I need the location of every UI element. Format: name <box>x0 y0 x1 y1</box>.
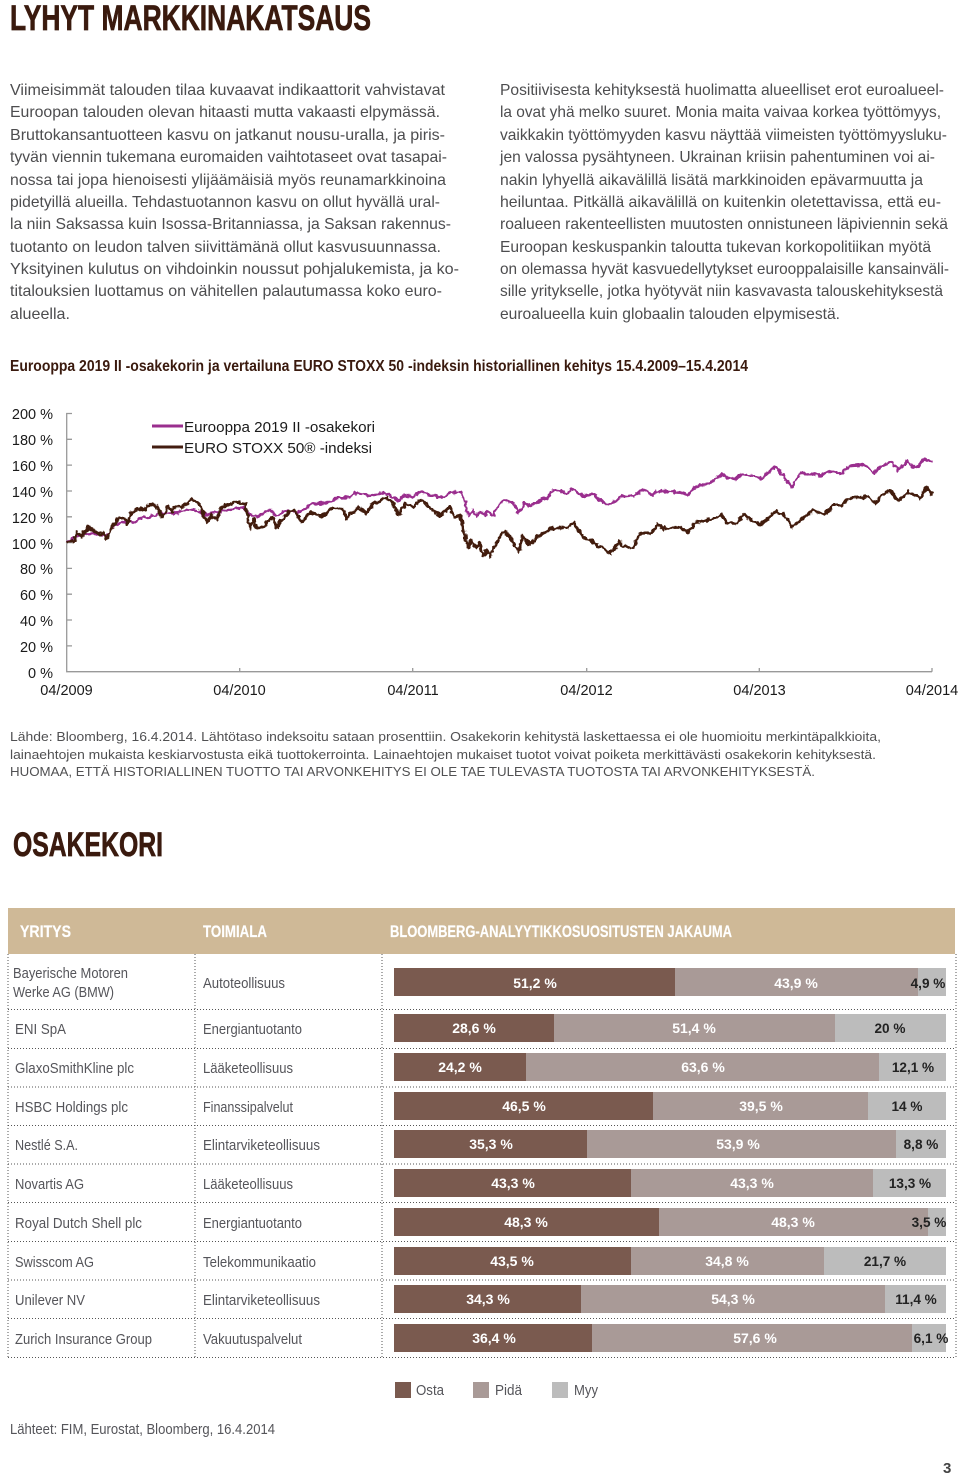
row: Royal Dutch Shell: Energiantuotanto <box>203 1216 302 1232</box>
text block: left column: alueella. <box>10 306 70 323</box>
row: BMW: Autoteollisuus <box>203 976 285 992</box>
text block: right column: nakin lyhyellä aikavälillä lisätä markkinoiden epävarmuutta ja <box>500 172 923 189</box>
axes <box>67 414 932 672</box>
y axis labels <box>12 407 53 682</box>
row: Unilever: Unilever NV <box>15 1293 85 1309</box>
row: Unilever: Elintarviketeollisuus <box>203 1293 320 1309</box>
row: Zurich: 36,4 % <box>472 1330 516 1346</box>
y axis labels: 80 % <box>20 562 53 578</box>
table: osakekori <box>8 908 956 1358</box>
text block: right column <box>499 82 949 323</box>
row: Novartis: 43,3 % <box>491 1175 535 1191</box>
row: HSBC <box>15 1092 946 1120</box>
row: Royal Dutch Shell: 48,3 % <box>771 1214 815 1230</box>
row: ENI: ENI SpA <box>15 1022 66 1038</box>
row: Nestlé: Nestlé S.A. <box>15 1138 78 1154</box>
row: HSBC: 46,5 % <box>502 1098 546 1114</box>
text block: right column: la ovat yhä melko suuret. Monia maita vaivaa korkea työttömyys, <box>500 104 941 121</box>
table header: BLOOMBERG-ANALYYTIKKOSUOSITUSTEN JAKAUMA <box>390 922 732 941</box>
legend: chart: EURO STOXX 50® -indeksi <box>184 440 372 457</box>
row: BMW: Bayerische Motoren <box>13 966 128 982</box>
row: GlaxoSmithKline: 63,6 % <box>681 1059 725 1075</box>
y axis labels: 20 % <box>20 640 53 656</box>
text block: left column: Viimeisimmät talouden tilaa kuvaavat indikaattorit vahvistavat <box>10 82 446 99</box>
legend: recommendations: Myy <box>574 1383 599 1399</box>
heading: Osakekori: OSAKEKORI <box>13 826 163 864</box>
text block: left column: titalouksien luottamus on vähitellen palautumassa koko euro- <box>10 283 442 300</box>
text block: right column: heiluntaa. Pitkällä aikavälillä on kuitenkin oletettavissa, että eu- <box>500 194 941 211</box>
text block: right column: jen valossa pysähtyneen. Ukrainan kriisin pahentuminen voi ai- <box>499 149 935 166</box>
row: Zurich: Zurich Insurance Group <box>15 1332 152 1348</box>
row: Swisscom: 43,5 % <box>490 1253 534 1269</box>
table grid <box>8 954 956 1358</box>
legend: chart: Eurooppa 2019 II -osakekori <box>184 419 375 436</box>
y axis labels: 120 % <box>12 511 53 527</box>
text block: left column: nossa tai jopa hienoisesti ylijäämäisiä myös reunamarkkinoina <box>10 172 446 189</box>
row: Zurich: 6,1 % <box>914 1331 948 1346</box>
table header: YRITYS <box>20 922 71 941</box>
legend: chart <box>152 419 375 457</box>
x axis labels: 04/2011 <box>387 683 439 699</box>
row: ENI: 51,4 % <box>672 1020 716 1036</box>
source note: HUOMAA, ETTÄ HISTORIALLINEN TUOTTO TAI ARVONKEHITYS EI OLE TAE TULEVASTA TUOTOSTA TAI ARVONKEHITYKSESTÄ. <box>10 765 815 779</box>
y axis labels: 100 % <box>12 537 53 553</box>
row: BMW <box>13 966 946 1001</box>
row: GlaxoSmithKline: 24,2 % <box>438 1059 482 1075</box>
row: Zurich: Vakuutuspalvelut <box>203 1332 302 1348</box>
row: Swisscom: Swisscom AG <box>15 1255 94 1271</box>
text block: right column: vaikkakin työttömyyden kasvu näyttää viimeisten työttömyysluku- <box>500 127 947 144</box>
sources: Lähteet: FIM, Eurostat, Bloomberg, 16.4.2014 <box>10 1422 275 1438</box>
legend: recommendations <box>395 1382 599 1399</box>
row: Royal Dutch Shell: Royal Dutch Shell plc <box>15 1216 142 1232</box>
text block: left column: Bruttokansantuotteen kasvu on jatkanut nousu-uralla, ja piris- <box>10 127 445 144</box>
row: ENI: 20 % <box>875 1021 905 1036</box>
source note <box>10 730 881 779</box>
row: BMW: Werke AG (BMW) <box>13 985 114 1001</box>
text block: left column: Euroopan talouden olevan hitaasti mutta vakaasti elpymässä. <box>10 104 440 121</box>
text block: left column <box>10 82 459 323</box>
row: Novartis: Novartis AG <box>15 1177 84 1193</box>
series: Eurooppa 2019 II -osakekori <box>67 458 932 542</box>
text block: right column: sille yritykselle, jotka hyötyvät niin kasvavasta talouskehityksestä <box>500 283 943 300</box>
table header <box>8 908 955 954</box>
row: Royal Dutch Shell: 48,3 % <box>504 1214 548 1230</box>
text block: right column: Positiivisesta kehityksestä huolimatta alueelliset erot euroalueel- <box>500 82 944 99</box>
text block: right column: roalueen rakenteellisten muutosten onnistuneen läpiviennin sekä <box>500 216 948 233</box>
text block: left column: Yksityinen kulutus on vihdoinkin noussut pohjalukemista, ja ko- <box>10 261 459 278</box>
row: Unilever <box>15 1285 946 1313</box>
row: Royal Dutch Shell: 3,5 % <box>912 1215 946 1230</box>
y axis labels: 140 % <box>12 485 53 501</box>
x axis labels: 04/2013 <box>733 683 786 699</box>
row: GlaxoSmithKline: 12,1 % <box>892 1060 934 1075</box>
legend: recommendations: Pidä <box>495 1383 523 1399</box>
source note: Lähde: Bloomberg, 16.4.2014. Lähtötaso indeksoitu sataan prosenttiin. Osakekorin kehitystä laskettaessa ei ole huomioitu merkintäpalkkioita, <box>10 730 881 744</box>
title: Lyhyt markkinakatsaus: LYHYT MARKKINAKATSAUS <box>10 0 371 38</box>
row: Swisscom: 21,7 % <box>864 1254 906 1269</box>
row: GlaxoSmithKline: GlaxoSmithKline plc <box>15 1061 134 1077</box>
row: HSBC: 14 % <box>892 1099 922 1114</box>
row: HSBC: 39,5 % <box>739 1098 783 1114</box>
x axis labels: 04/2010 <box>213 683 266 699</box>
row: ENI <box>15 1014 946 1042</box>
row: Swisscom: Telekommunikaatio <box>203 1255 316 1271</box>
line chart <box>12 407 958 699</box>
row: GlaxoSmithKline: Lääketeollisuus <box>203 1061 293 1077</box>
x axis labels: 04/2012 <box>560 683 613 699</box>
row: GlaxoSmithKline <box>15 1053 946 1081</box>
row: Swisscom: 34,8 % <box>705 1253 749 1269</box>
row: Nestlé: 53,9 % <box>716 1136 760 1152</box>
row: ENI: 28,6 % <box>452 1020 496 1036</box>
text block: left column: pidetyillä alueilla. Tehdastuotannon kasvu on ollut hyvällä ural- <box>10 194 440 211</box>
row: BMW: 43,9 % <box>774 975 818 991</box>
row: Novartis: 13,3 % <box>889 1176 931 1191</box>
source note: lainaehtojen mukaista keskiarvostusta eikä tuottokerrointa. Lainaehtojen mukaiset tuotot voivat poiketa merkittävästi osakekorin kehityksestä. <box>10 748 876 762</box>
row: ENI: Energiantuotanto <box>203 1022 302 1038</box>
row: Swisscom <box>15 1247 946 1275</box>
row: Novartis: Lääketeollisuus <box>203 1177 293 1193</box>
text block: right column: euroalueella kuin globaalin talouden elpymisestä. <box>500 306 840 323</box>
text block: right column: on olemassa hyvät kasvuedellytykset eurooppalaisille kansainväli- <box>500 261 949 278</box>
row: Novartis: 43,3 % <box>730 1175 774 1191</box>
y axis labels: 160 % <box>12 459 53 475</box>
legend: recommendations: Osta <box>416 1383 445 1399</box>
text block: left column: tuotanto on leudon talven siivittämänä ollut kasvusuunnassa. <box>10 239 441 256</box>
table header: TOIMIALA <box>203 922 267 941</box>
row: BMW: 4,9 % <box>911 976 945 991</box>
row: Novartis <box>15 1169 946 1197</box>
text block: left column: tyvän viennin tukemana euromaiden vaihtotaseet ovat tasapai- <box>10 149 447 166</box>
row: Nestlé: 8,8 % <box>904 1137 938 1152</box>
chart title: Eurooppa 2019 II -osakekorin ja vertailuna EURO STOXX 50 -indeksin historiallinen kehitys 15.4.2009–15.4.2014 <box>10 358 748 375</box>
row: Zurich <box>15 1324 948 1352</box>
row: Nestlé: 35,3 % <box>469 1136 513 1152</box>
y axis labels: 200 % <box>12 407 53 423</box>
x axis labels: 04/2009 <box>40 683 93 699</box>
row: Unilever: 34,3 % <box>466 1291 510 1307</box>
row: Unilever: 54,3 % <box>711 1291 755 1307</box>
row: Unilever: 11,4 % <box>895 1292 937 1307</box>
y axis labels: 40 % <box>20 614 53 630</box>
x axis labels <box>40 683 958 699</box>
y axis labels: 60 % <box>20 588 53 604</box>
row: Nestlé: Elintarviketeollisuus <box>203 1138 320 1154</box>
row: BMW: 51,2 % <box>513 975 557 991</box>
row: Nestlé <box>15 1130 946 1158</box>
row: Zurich: 57,6 % <box>733 1330 777 1346</box>
y axis labels: 0 % <box>28 666 53 682</box>
x axis labels: 04/2014 <box>906 683 958 699</box>
row: HSBC: Finanssipalvelut <box>203 1100 293 1116</box>
series: EURO STOXX 50 -indeksi <box>67 487 932 557</box>
text block: right column: Euroopan keskuspankin taloutta tukevan korkopolitiikan myötä <box>500 239 931 256</box>
row: Royal Dutch Shell <box>15 1208 946 1236</box>
y axis labels: 180 % <box>12 433 53 449</box>
row: HSBC: HSBC Holdings plc <box>15 1100 128 1116</box>
text block: left column: la niin Saksassa kuin Isossa-Britanniassa, ja Saksan rakennus- <box>10 216 451 233</box>
